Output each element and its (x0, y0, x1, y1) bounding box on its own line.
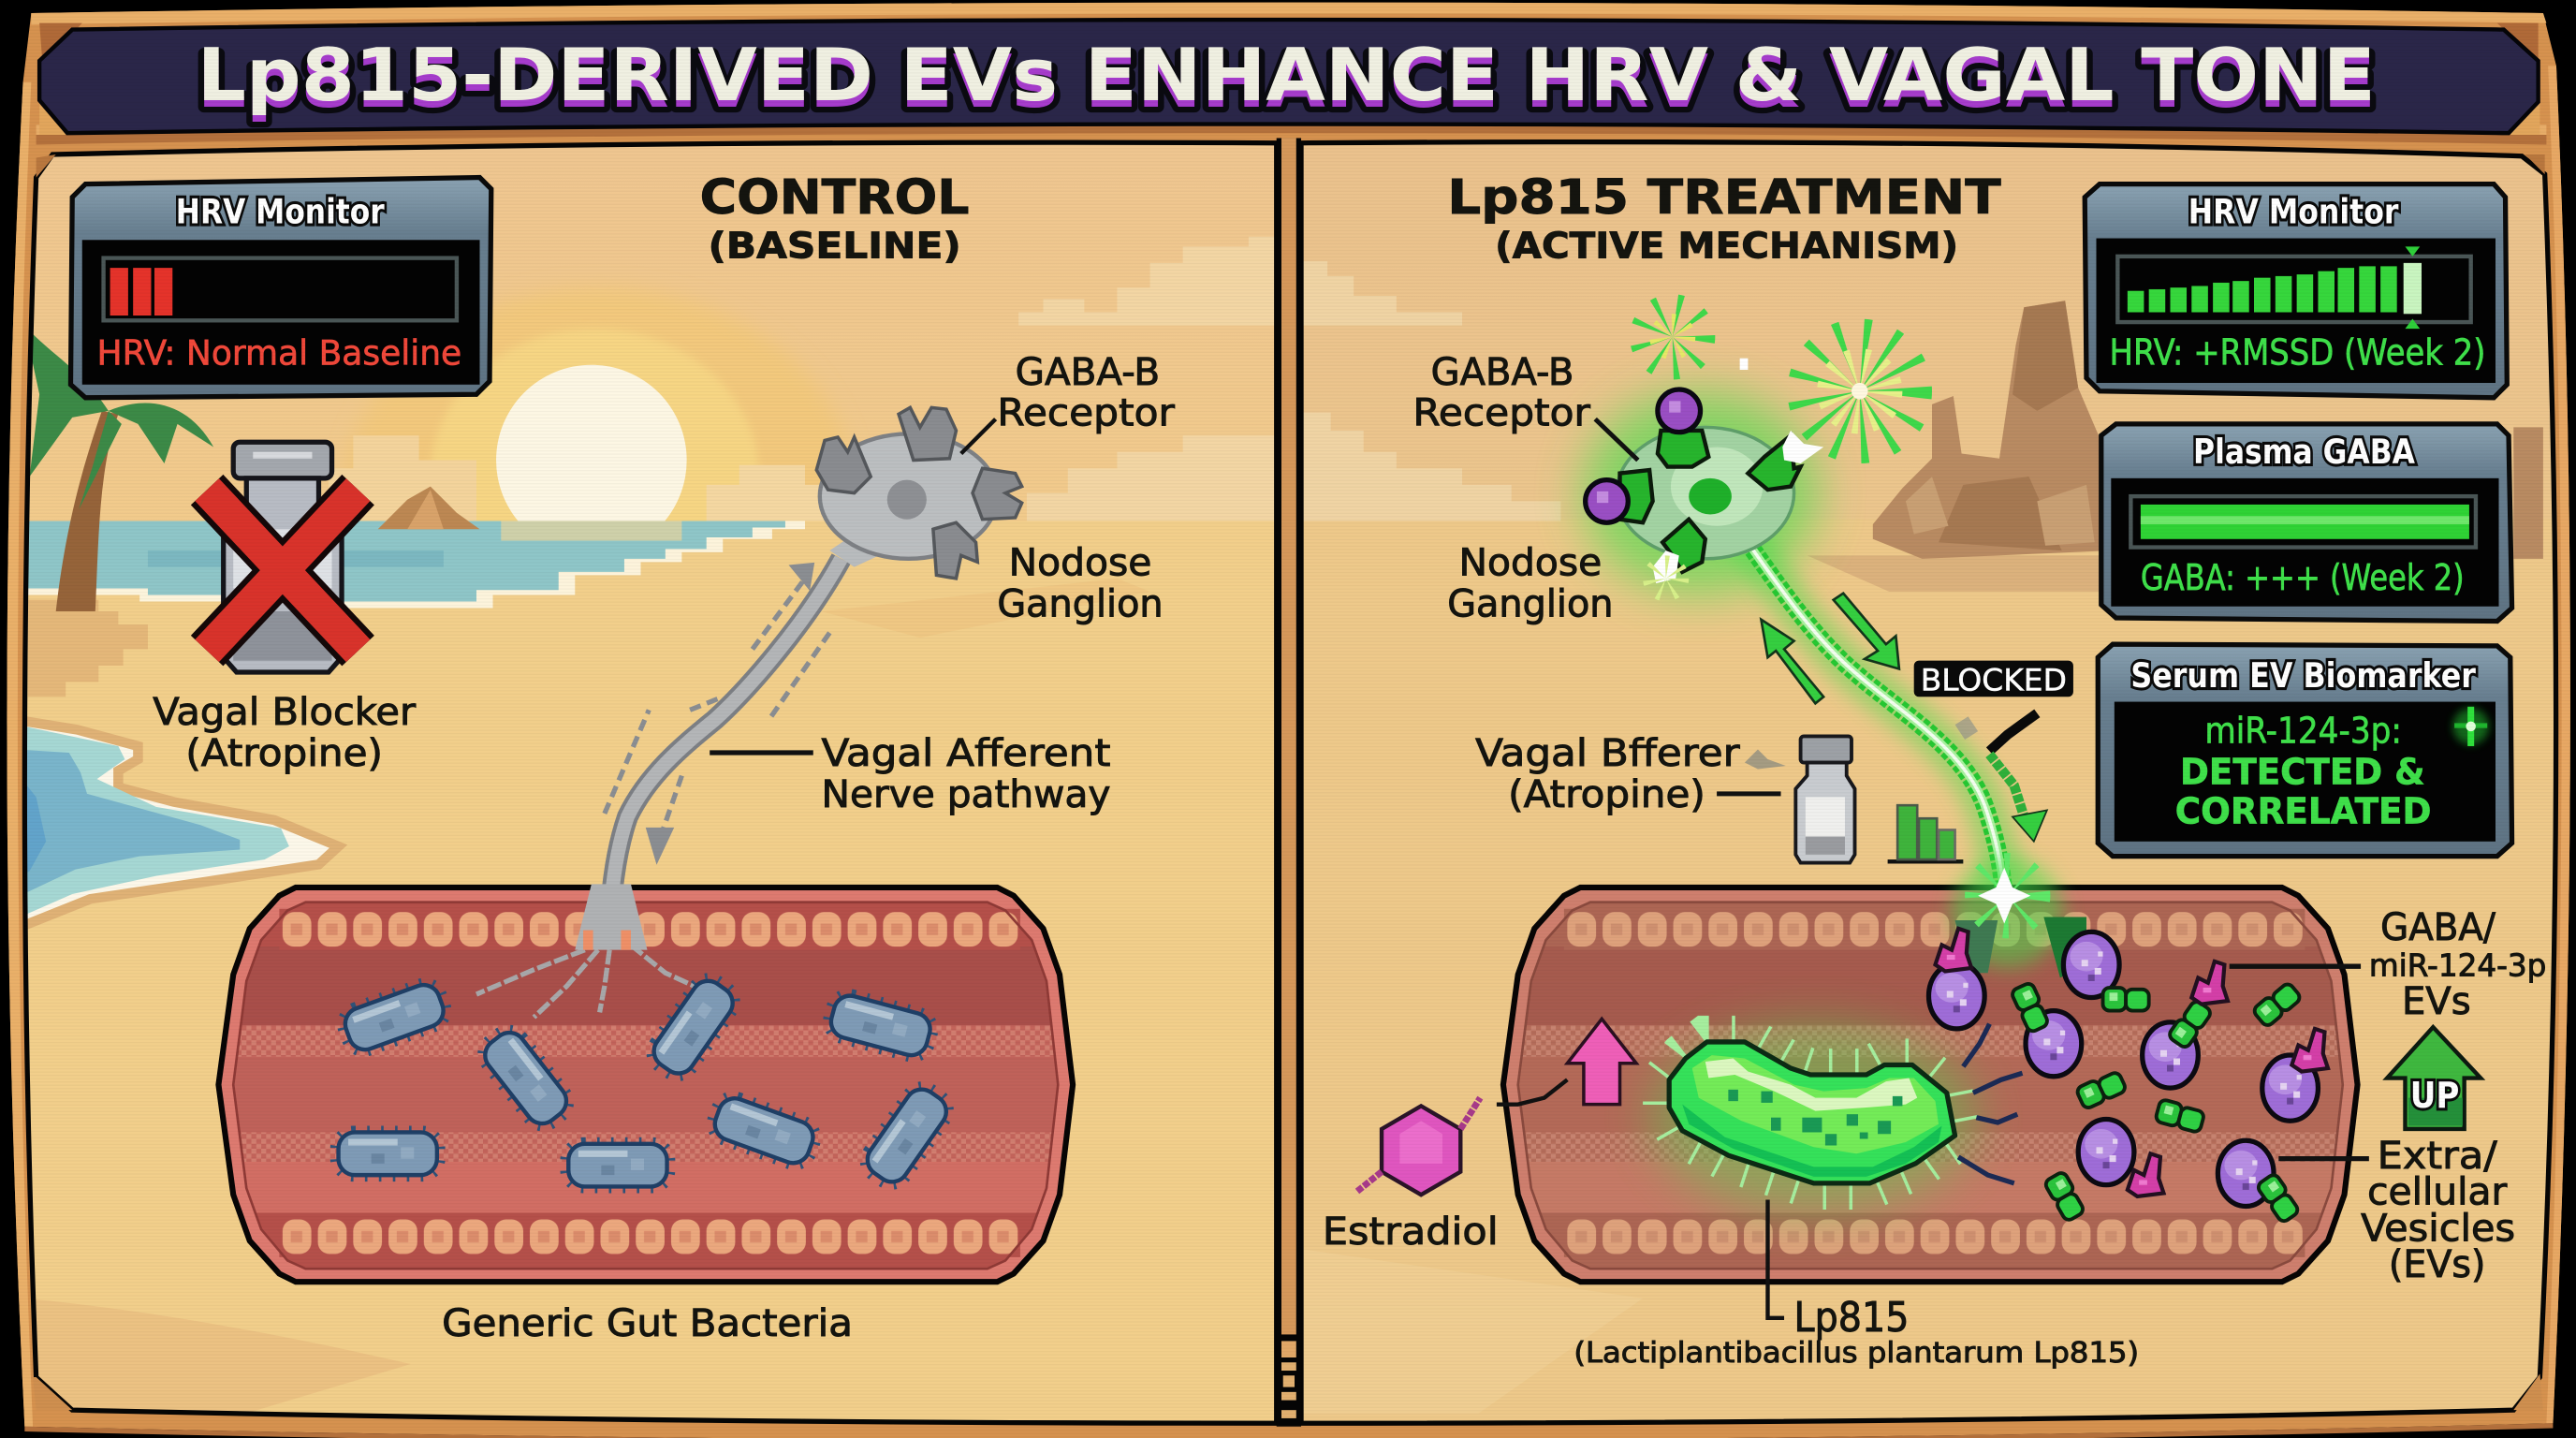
label: lp815 (1573, 1199, 2139, 1370)
panel border (1301, 142, 2556, 1423)
label: gaba-b receptor treatment: GABA-B (1431, 350, 1573, 394)
rock formation (1873, 301, 2543, 559)
label: nodose ganglion treatment (1447, 540, 1614, 625)
gaba bar (2130, 496, 2476, 548)
serum ev biomarker monitor: Serum EV Biomarker (2130, 655, 2477, 696)
glowing nerve (1727, 513, 2004, 896)
label: lp815: Lp815 (1794, 1294, 1909, 1342)
icon: atropine vial (1795, 736, 1855, 863)
label: nodose ganglion treatment: Nodose (1459, 540, 1602, 584)
sparks (1651, 315, 1895, 590)
label: nodose ganglion control: Ganglion (997, 581, 1164, 625)
label: gaba-b receptor control (961, 350, 1175, 453)
hrv monitor: treatment: HRV: +RMSSD (Week 2) (2110, 332, 2485, 374)
beach background (8, 131, 1290, 1438)
panel: lp815 treatment (1290, 131, 2571, 1438)
estradiol molecule (1357, 1079, 1567, 1195)
hrv monitor: control (70, 178, 491, 398)
pink up arrow (1567, 1019, 1636, 1105)
receptor right (1748, 435, 1801, 490)
hrv bar green (2117, 246, 2471, 329)
nerve roots in gut (476, 884, 701, 1018)
plasma gaba monitor: GABA: +++ (Week 2) (2141, 557, 2465, 599)
extracellular vesicles (1928, 932, 2318, 1206)
vagal afferent nerve (607, 559, 842, 945)
hrv monitor: control: HRV Monitor (176, 192, 385, 232)
label: blocked: BLOCKED (1921, 664, 2067, 697)
panel: control (8, 131, 1290, 1438)
heading: lp815 treatment: (ACTIVE MECHANISM) (1495, 226, 1958, 268)
epithelial cells (1564, 909, 2305, 1257)
label: lp815: (Lactiplantibacillus plantarum Lp815) (1573, 1337, 2139, 1370)
desert background (1290, 131, 2571, 1438)
label: nodose ganglion control: Nodose (1009, 540, 1151, 584)
label: vagal efferent atropine: Vagal Bfferer (1475, 731, 1740, 775)
receptor bottom (1662, 520, 1705, 572)
bacterium glow (1649, 1022, 1978, 1213)
label: gaba mir-124-3p evs: miR-124-3p (2369, 947, 2546, 984)
arrow: afferent up (1761, 620, 1823, 703)
epithelial cells (279, 909, 1020, 1257)
label: extracellular vesicles: Extra/ (2378, 1134, 2497, 1178)
label: vagal afferent nerve pathway: Vagal Afferent (822, 731, 1110, 775)
arrow: efferent down (1834, 594, 1899, 668)
generic bacteria (333, 969, 959, 1195)
label: nodose ganglion treatment: Ganglion (1447, 581, 1614, 625)
gut cross-section: control (213, 884, 1084, 1282)
palm tree (24, 326, 213, 611)
heading: control (700, 170, 970, 268)
gut cross-section: treatment (1499, 888, 2369, 1282)
hrv monitor: control: HRV: Normal Baseline (97, 333, 461, 374)
serum ev biomarker monitor: DETECTED & (2180, 751, 2425, 793)
label: generic gut bacteria: Generic Gut Bacteria (442, 1301, 853, 1345)
title banner (39, 20, 2539, 133)
icon: up arrow: UP (2410, 1075, 2459, 1117)
receptor left (1586, 470, 1653, 522)
nerve terminals and burst (1952, 857, 2086, 977)
label: extracellular vesicles: Vesicles (2361, 1206, 2515, 1250)
title text: Lp815-DERIVED EVs ENHANCE HRV & VAGAL TONE (198, 40, 2376, 125)
shoreline wave (17, 600, 339, 929)
signal arrows grey (605, 565, 829, 858)
label: gaba mir-124-3p evs (2230, 905, 2546, 1023)
receptor top (1658, 389, 1708, 467)
label: gaba mir-124-3p evs: EVs (2402, 979, 2471, 1023)
hrv monitor: treatment: HRV Monitor (2188, 192, 2399, 232)
heading: lp815 treatment (1447, 170, 2001, 268)
label: extracellular vesicles: (EVs) (2389, 1242, 2485, 1286)
serum ev biomarker monitor (2098, 644, 2512, 857)
title text: Lp815-DERIVED EVs ENHANCE HRV & VAGAL TONE (198, 34, 2376, 118)
red x (207, 490, 359, 651)
label: gaba-b receptor treatment (1412, 350, 1638, 461)
hrv bar red (104, 258, 457, 320)
label: vagal blocker (153, 690, 416, 775)
heading: control: CONTROL (700, 170, 970, 226)
label: gaba mir-124-3p evs: GABA/ (2380, 905, 2496, 949)
label: extracellular vesicles: cellular (2367, 1170, 2508, 1214)
label: vagal efferent atropine: (Atropine) (1508, 772, 1705, 816)
icon: up arrow (2387, 1027, 2481, 1129)
label: gaba-b receptor treatment: Receptor (1412, 391, 1590, 435)
panel border (24, 142, 1277, 1423)
serum ev biomarker monitor: miR-124-3p: (2204, 710, 2402, 752)
label: vagal blocker: (Atropine) (185, 731, 383, 775)
label: vagal efferent atropine (1475, 731, 1786, 816)
icon: small bar chart (1888, 805, 1963, 863)
label: estradiol: Estradiol (1323, 1210, 1499, 1254)
mir-124-3p molecules (1936, 929, 2328, 1196)
secretion arrows (1958, 1024, 2023, 1183)
icon: blocked vial (207, 442, 359, 672)
arrow: blocked efferent (1955, 713, 2047, 842)
label: vagal afferent nerve pathway (710, 731, 1110, 816)
gaba molecules (2011, 980, 2302, 1224)
receptor center (1689, 478, 1732, 514)
label: vagal blocker: Vagal Blocker (153, 690, 416, 734)
ganglion glow (1582, 391, 1819, 594)
plasma gaba monitor: Plasma GABA (2193, 432, 2415, 472)
label: gaba-b receptor control: Receptor (997, 391, 1175, 435)
activated nodose ganglion (1582, 315, 2004, 896)
hrv monitor: treatment (2085, 184, 2507, 398)
lp815 bacterium (1649, 1022, 1978, 1213)
center divider (1277, 138, 1301, 1427)
label: gaba-b receptor control: GABA-B (1016, 350, 1160, 394)
status led (2452, 707, 2489, 746)
heading: control: (BASELINE) (708, 226, 961, 268)
label: nodose ganglion control (997, 540, 1164, 625)
serum ev biomarker monitor: CORRELATED (2175, 790, 2432, 832)
label: vagal afferent nerve pathway: Nerve pathway (822, 772, 1110, 816)
heading: lp815 treatment: Lp815 TREATMENT (1447, 170, 2001, 226)
title text: Lp815-DERIVED EVs ENHANCE HRV & VAGAL TONE (198, 40, 2376, 125)
label: extracellular vesicles (2278, 1134, 2515, 1286)
nodose ganglion grey (605, 407, 1022, 945)
plasma gaba monitor (2101, 424, 2512, 622)
